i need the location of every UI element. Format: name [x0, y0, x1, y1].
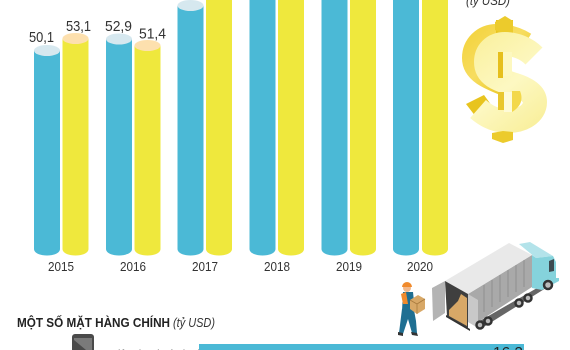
side ribs [484, 260, 524, 312]
icon: smartphone [72, 334, 94, 350]
cab body [532, 255, 559, 290]
torso [402, 292, 415, 311]
loading ramp [446, 315, 470, 331]
cargo box roof [445, 243, 532, 294]
bars 2016 [105, 18, 166, 274]
shoes [398, 332, 418, 336]
cargo box side [468, 255, 532, 322]
bars 2015: 2015 [48, 260, 74, 274]
bar chart [29, 0, 448, 274]
bars 2015 [29, 18, 91, 274]
wheels [476, 281, 552, 328]
truck chassis [478, 284, 546, 328]
cargo boxes [449, 294, 467, 326]
bars 2018 [250, 0, 304, 274]
bars 2015: 50,1 [29, 29, 54, 46]
head [403, 284, 411, 292]
bars 2018: 2018 [264, 260, 290, 274]
bars 2017: 2017 [192, 260, 218, 274]
icon: gold dollar sign [466, 16, 535, 143]
bars 2019 [322, 0, 376, 274]
heading: main items: MỘT SỐ MẶT HÀNG CHÍNH [17, 315, 170, 330]
bars 2019: 2019 [336, 260, 362, 274]
cab window [549, 259, 554, 272]
carried boxes [410, 295, 425, 314]
bars 2016: 2016 [120, 260, 146, 274]
bars 2016: 51,4 [139, 26, 166, 42]
bars 2020 [393, 0, 448, 274]
right door [468, 294, 478, 328]
item bar: phones [199, 344, 524, 350]
bars 2016: 52,9 [105, 18, 132, 35]
cab roof [519, 242, 553, 258]
icon: worker carrying boxes [398, 282, 425, 336]
legs [399, 309, 417, 334]
sleeve [401, 292, 408, 304]
hard hat [402, 282, 412, 287]
bars 2017 [178, 0, 232, 274]
cargo interior [445, 281, 468, 328]
icon: container truck [432, 242, 559, 331]
left door [432, 281, 445, 321]
bars 2015: 53,1 [66, 18, 91, 35]
bars 2020: 2020 [407, 260, 433, 274]
heading: main items: (tỷ USD) [173, 315, 215, 330]
